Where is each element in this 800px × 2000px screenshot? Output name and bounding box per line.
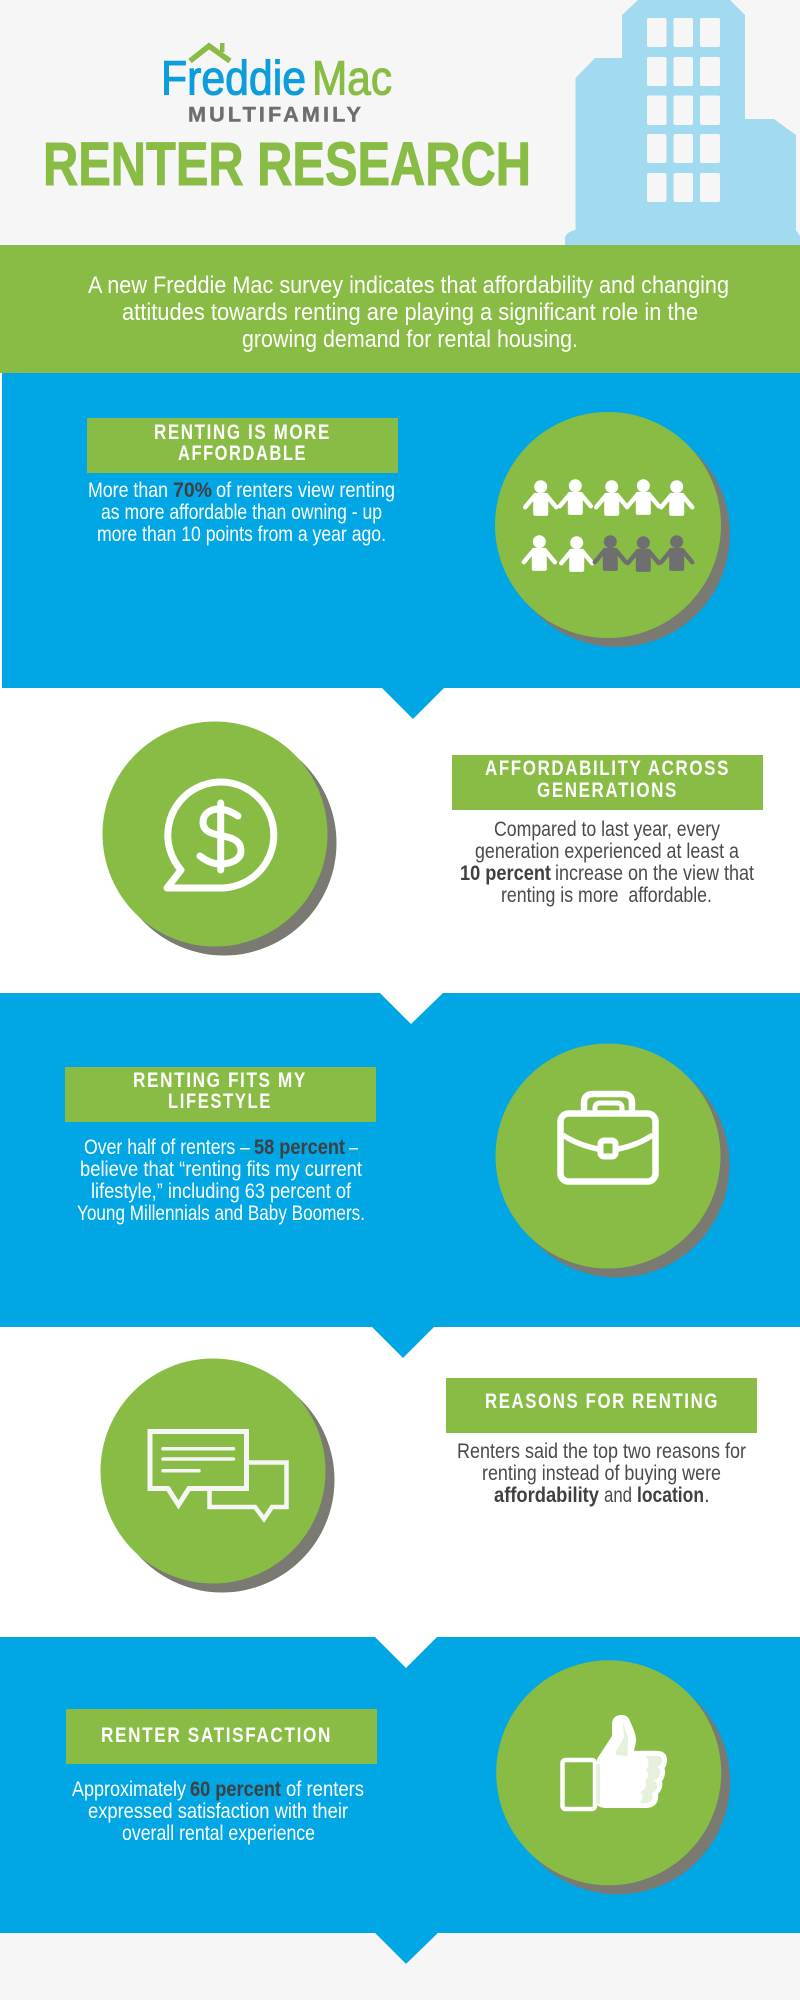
body text: 58 percent — [254, 1136, 345, 1159]
body text: as more affordable than owning - up — [101, 501, 382, 524]
icon: briefcase circle — [496, 1044, 730, 1278]
body text: affordability — [494, 1484, 599, 1507]
panel: intro band: attitudes towards renting are playing a significant role in the — [122, 299, 698, 326]
body text: generation experienced at least a — [475, 840, 739, 863]
icon: dollar speech bubble circle — [102, 722, 336, 956]
panel: intro band: growing demand for rental housing. — [242, 326, 578, 353]
panel: renting is more affordable — [2, 373, 800, 719]
body text: Compared to last year, every — [494, 818, 720, 841]
body text: and — [604, 1484, 632, 1507]
body text: Renters said the top two reasons for — [457, 1440, 746, 1463]
heading tag: RENTING IS MORE — [154, 421, 331, 444]
body text: believe that “renting fits my current — [80, 1158, 362, 1181]
body text — [460, 818, 754, 907]
heading tag: RENTING FITS MY — [133, 1069, 307, 1092]
body text: Young Millennials and Baby Boomers. — [77, 1202, 365, 1225]
body text: overall rental experience — [122, 1822, 315, 1845]
heading tag — [66, 1709, 377, 1764]
heading tag — [87, 418, 398, 473]
body text: Over half of renters – — [84, 1136, 250, 1159]
icon: chat bubbles circle — [100, 1358, 334, 1592]
heading tag: AFFORDABILITY ACROSS — [485, 757, 730, 780]
heading tag — [452, 755, 763, 810]
logo: Freddie Mac Multifamily: MULTIFAMILY — [188, 104, 364, 126]
body text: of renters — [286, 1778, 364, 1801]
heading tag — [446, 1378, 757, 1433]
logo: Freddie Mac Multifamily — [161, 43, 392, 126]
body text: more than 10 points from a year ago. — [97, 523, 386, 546]
body text — [72, 1778, 364, 1845]
heading tag: AFFORDABLE — [178, 442, 307, 465]
logo: Freddie Mac Multifamily: Freddie — [161, 52, 306, 106]
body text: location — [637, 1484, 704, 1507]
body text: expressed satisfaction with their — [88, 1800, 348, 1823]
panel: intro band — [0, 245, 800, 373]
panel: intro band: A new Freddie Mac survey indicates that affordability and changing — [88, 272, 729, 299]
body text — [77, 1136, 365, 1225]
panel: reasons for renting — [100, 1358, 757, 1592]
title: RENTER RESEARCH — [43, 130, 531, 198]
heading tag: REASONS FOR RENTING — [485, 1390, 719, 1413]
icon: thumbs up circle — [496, 1660, 730, 1894]
body text: of renters view renting — [216, 479, 395, 502]
icon: people circle — [495, 412, 730, 647]
body text: renting instead of buying were — [482, 1462, 721, 1485]
body text: . — [704, 1484, 710, 1507]
body text: More than — [88, 479, 168, 502]
heading tag — [65, 1067, 376, 1122]
body text: lifestyle,” including 63 percent of — [91, 1180, 351, 1203]
heading tag: GENERATIONS — [537, 779, 678, 802]
heading tag: RENTER SATISFACTION — [101, 1724, 332, 1747]
body text — [88, 479, 395, 546]
heading tag: LIFESTYLE — [168, 1090, 272, 1113]
panel: affordability across generations — [102, 722, 763, 956]
body text: Approximately — [72, 1778, 186, 1801]
footer background — [0, 1933, 800, 2000]
body text: 70% — [173, 479, 212, 502]
logo: Freddie Mac Multifamily: Mac — [312, 52, 392, 106]
body text: increase on the view that — [555, 862, 754, 885]
body text: 10 percent — [460, 862, 551, 885]
header background — [0, 0, 800, 245]
body text: – — [349, 1136, 358, 1159]
body text — [457, 1440, 746, 1507]
icon: building — [565, 0, 800, 245]
body text: 60 percent — [190, 1778, 281, 1801]
body text: renting is more affordable. — [501, 884, 712, 907]
panel: renting fits my lifestyle — [0, 993, 800, 1358]
panel: renter satisfaction — [0, 1637, 800, 1964]
